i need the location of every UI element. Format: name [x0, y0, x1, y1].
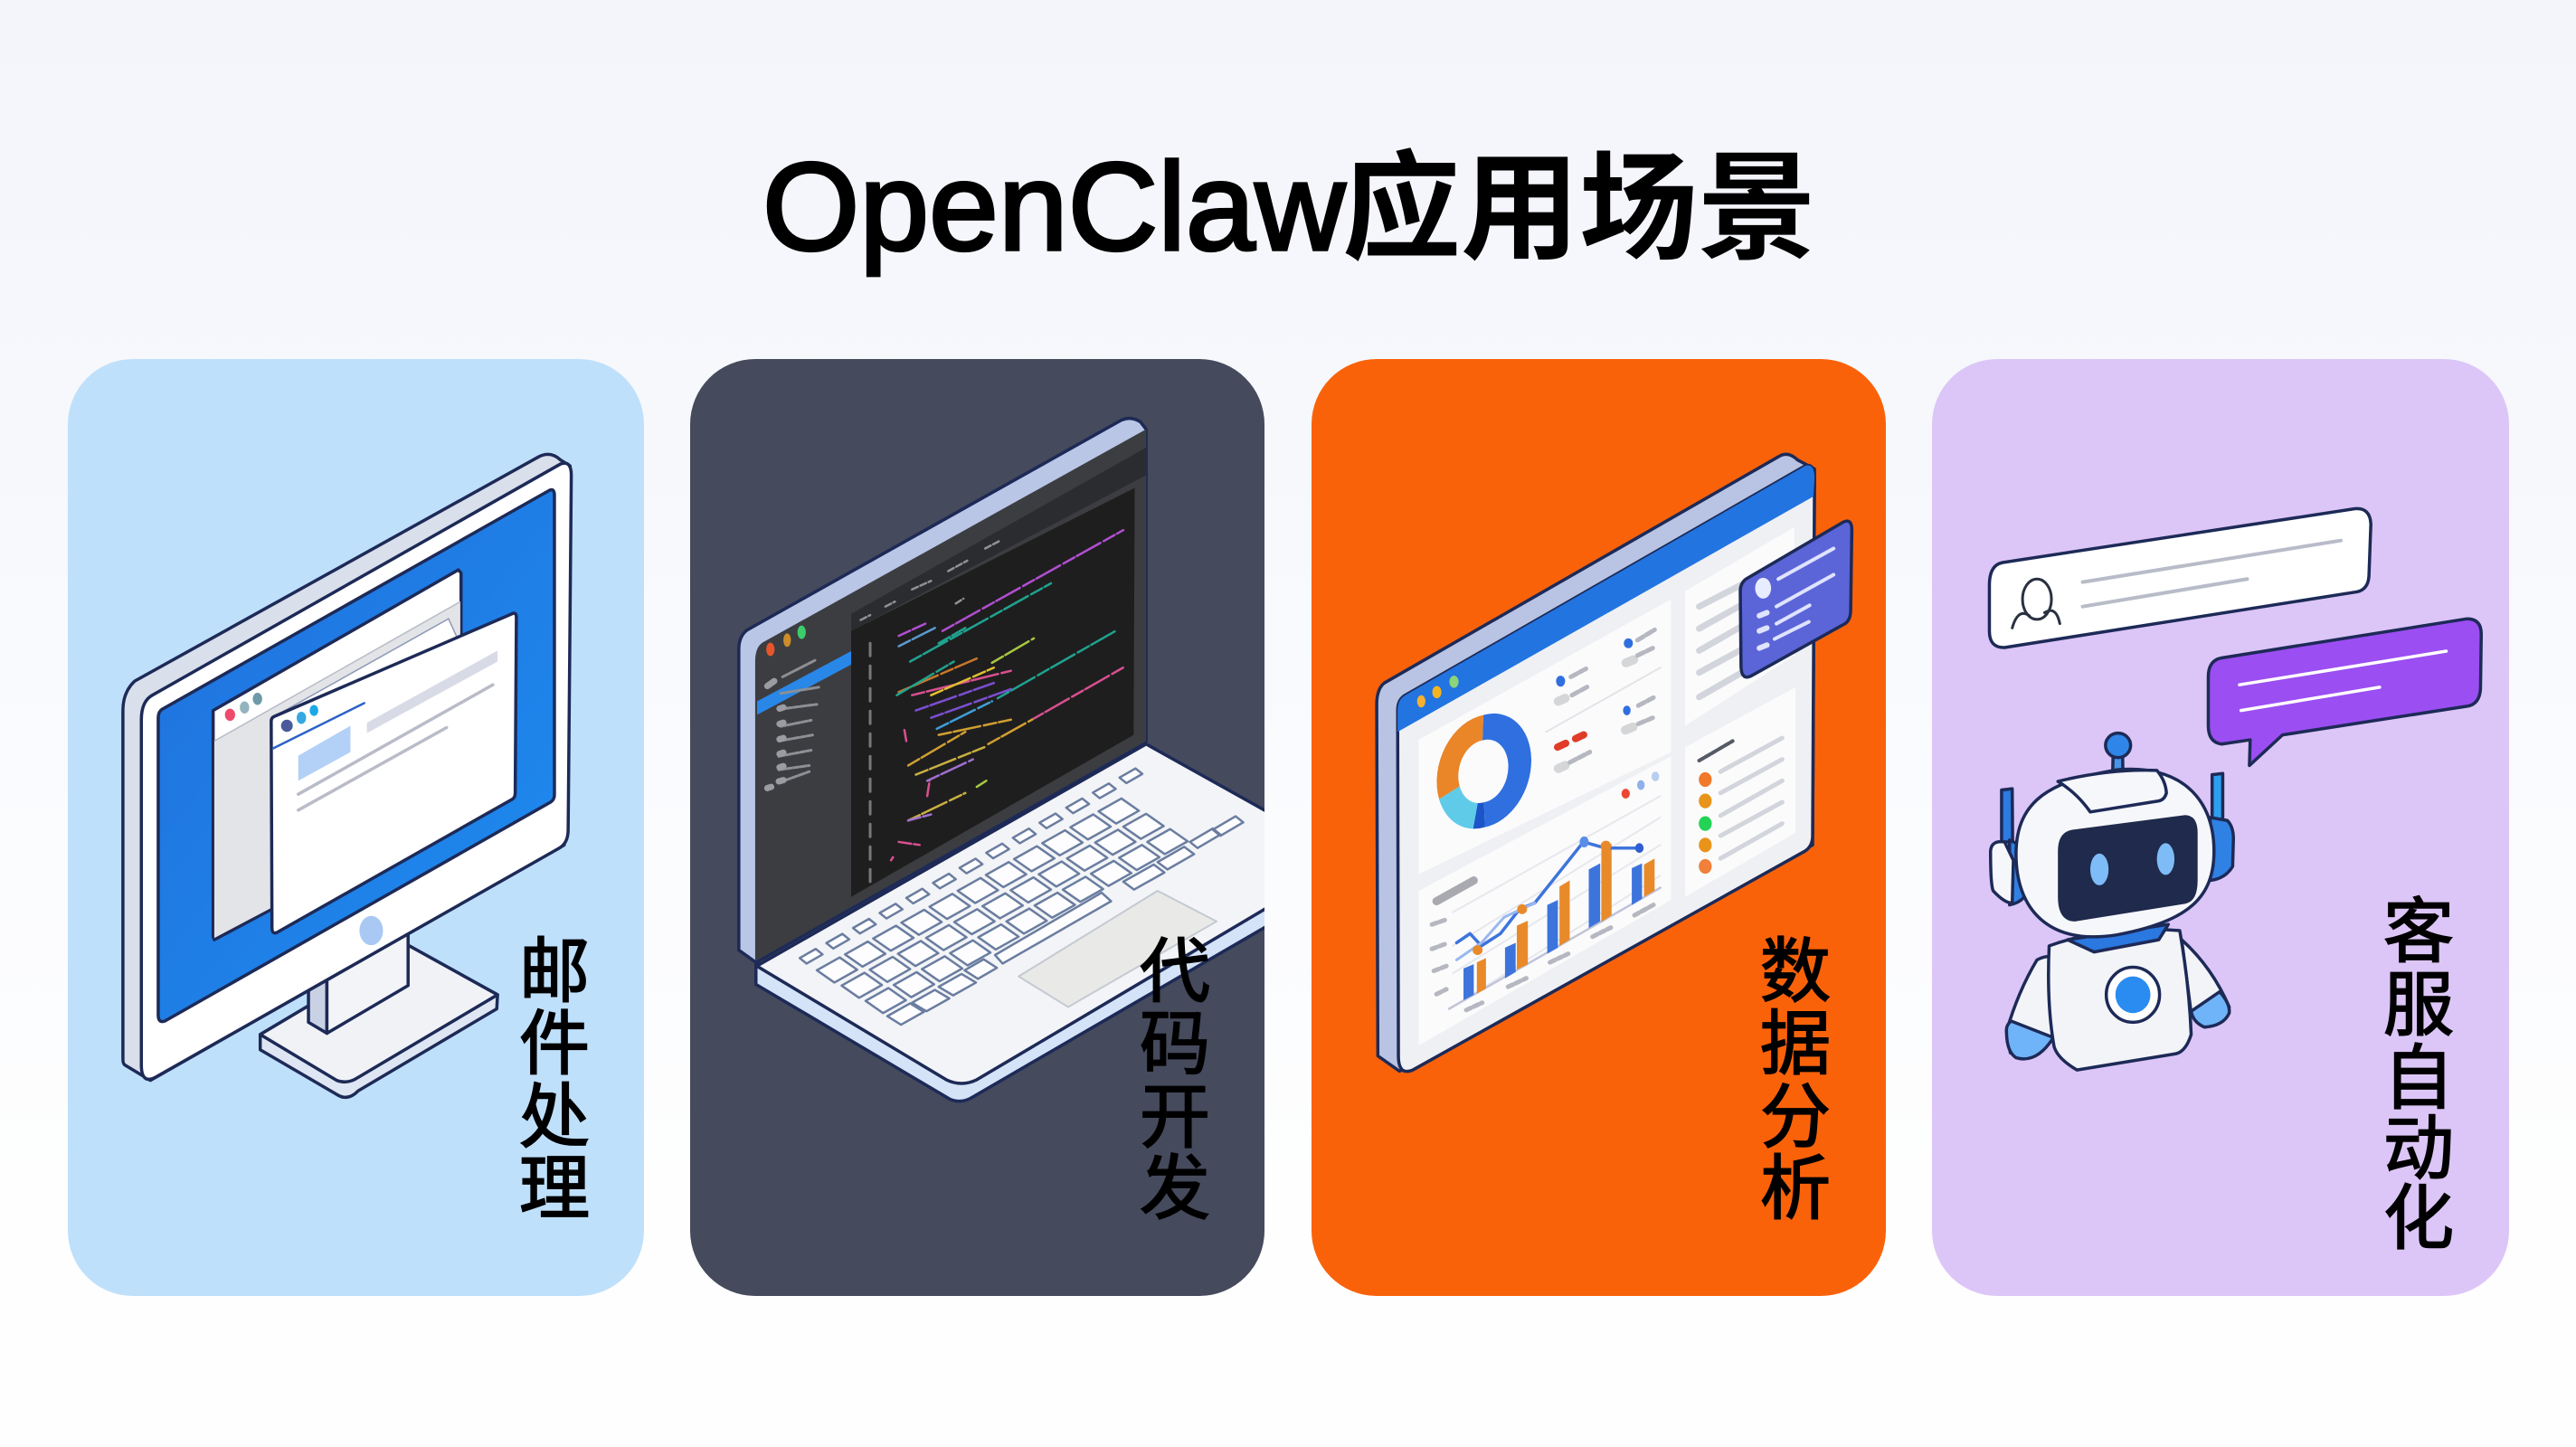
- monitor screen: [158, 490, 554, 1022]
- robot head plate: [2058, 771, 2166, 812]
- front email window: [271, 613, 516, 933]
- panel: email: [68, 359, 644, 1296]
- icon: chat and robot: [1989, 508, 2481, 1070]
- monitor bezel: [141, 463, 572, 1079]
- card background: data: [1312, 359, 1886, 1296]
- robot chest light: [2107, 968, 2160, 1022]
- floating card: [1740, 521, 1852, 677]
- trackpad: [1018, 891, 1217, 1007]
- back email window: [213, 570, 461, 940]
- dashboard side: [1377, 454, 1814, 1071]
- power button: [359, 916, 383, 945]
- icon: desktop monitor: [123, 454, 572, 1097]
- label: email: 邮件处理: [519, 932, 590, 1228]
- label: data: 数据分析: [1760, 932, 1831, 1228]
- title: 应用场景: [1342, 142, 1816, 275]
- card background: customer service: [1932, 359, 2509, 1296]
- panel: data: [1312, 359, 1886, 1296]
- laptop keyboard deck: [757, 744, 1270, 1083]
- card background: email: [68, 359, 644, 1296]
- monitor stand neck: [308, 931, 408, 1034]
- dashboard header bar: [1397, 466, 1814, 732]
- laptop base underside: [756, 906, 1270, 1102]
- keyboard keys: [800, 769, 1244, 1025]
- label: code: 代码开发: [1140, 932, 1210, 1228]
- icon: dashboard: [1377, 454, 1852, 1072]
- robot body: [2049, 929, 2192, 1070]
- code lines: [891, 530, 1125, 860]
- robot arms: [2006, 940, 2230, 1059]
- panel: code: [690, 359, 1270, 1296]
- dashboard front: [1397, 466, 1814, 1072]
- label: customer service: 客服自动化: [2383, 892, 2454, 1258]
- monitor body: [123, 454, 570, 1081]
- laptop screen: [755, 430, 1146, 961]
- icon: laptop: [739, 419, 1270, 1102]
- robot antennas and ears: [1991, 733, 2233, 905]
- robot head: [2016, 769, 2214, 937]
- card background: code: [690, 359, 1264, 1296]
- robot face: [2058, 815, 2198, 922]
- dashboard cards: [1418, 527, 1795, 1045]
- side list top: [1700, 583, 1782, 697]
- robot collar: [2068, 924, 2168, 952]
- monitor stand base: [260, 946, 497, 1097]
- title: OpenClaw: [762, 137, 1345, 277]
- stat items: [1546, 629, 1661, 769]
- combo chart: [1432, 771, 1661, 1010]
- status list: [1699, 738, 1782, 874]
- bot chat bubble: [2208, 619, 2481, 765]
- user chat bubble: [1989, 508, 2371, 648]
- donut chart: [1427, 695, 1540, 848]
- panel: customer service: [1932, 359, 2509, 1296]
- robot: [1991, 733, 2233, 1070]
- laptop lid: [739, 419, 1146, 962]
